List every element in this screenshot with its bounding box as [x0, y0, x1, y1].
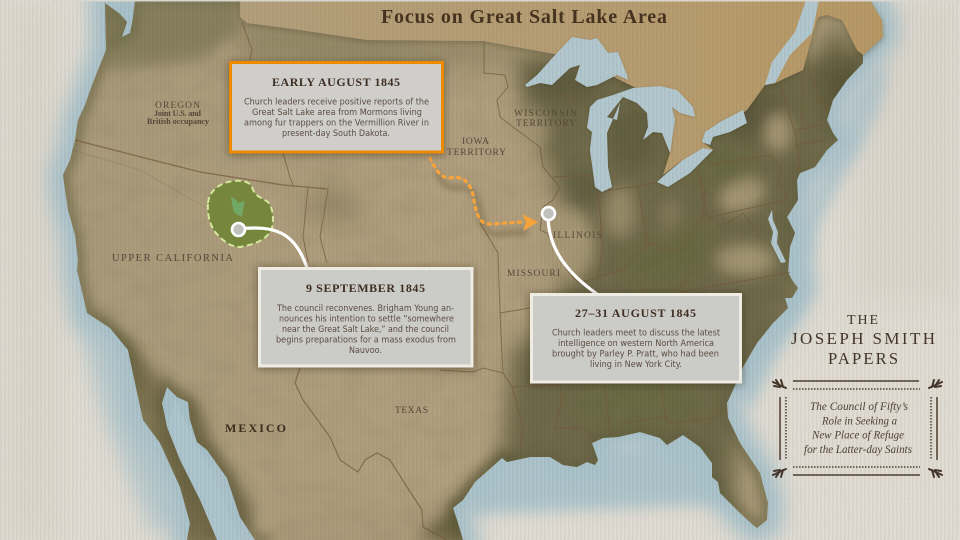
- panel: 27-31 August 1845: [532, 294, 740, 382]
- label: Wisconsin Territory: [514, 109, 577, 129]
- icon: Great Salt Lake: [231, 196, 245, 217]
- panel: early August 1845: [230, 62, 442, 152]
- arrowhead: [522, 214, 538, 231]
- Oregon boundary: [75, 140, 328, 189]
- subtitle text: Role in Seeking a: [821, 416, 897, 428]
- logo: The Joseph Smith Papers: THE: [847, 313, 878, 328]
- body text: [276, 303, 456, 356]
- logo: The Joseph Smith Papers: [791, 313, 935, 368]
- body text: Great Salt Lake area from Mormons living: [252, 107, 422, 118]
- body text: The council reconvenes. Brigham Young an-: [276, 303, 454, 314]
- body text: present-day South Dakota.: [282, 128, 390, 139]
- label: Oregon: OREGON: [155, 101, 200, 111]
- heading: 27–31 AUGUST 1845: [575, 306, 696, 320]
- subtitle text: [804, 401, 913, 456]
- body text: intelligence on western North America: [558, 338, 714, 349]
- icon: corner ornaments: [773, 380, 942, 477]
- body text: brought by Parley P. Pratt, who had been: [552, 348, 719, 360]
- connector: Nauvoo point to late August panel: [542, 207, 597, 294]
- Lake Michigan: [587, 95, 623, 192]
- label: Iowa Territory: IOWA: [462, 137, 489, 147]
- body text: among fur trappers on the Vermillion River in: [244, 118, 429, 128]
- map labels: [112, 101, 602, 435]
- body text: Church leaders receive positive reports of the: [244, 96, 429, 108]
- body text: living in New York City.: [590, 359, 682, 370]
- heading: 9 SEPTEMBER 1845: [306, 281, 425, 295]
- Canada region: [240, 0, 883, 175]
- label: Oregon: British occupancy: [147, 117, 209, 126]
- western and northern shading: [234, 23, 517, 228]
- logo: The Joseph Smith Papers: JOSEPH SMITH: [791, 329, 935, 348]
- label: Mexico: MEXICO: [225, 421, 286, 435]
- Great Salt Lake focus area: [208, 181, 273, 247]
- connector: Salt Lake point to September panel: [232, 223, 307, 268]
- label: Wisconsin Territory: WISCONSIN: [514, 109, 577, 119]
- label: Oregon: [147, 101, 209, 126]
- label: Wisconsin Territory: TERRITORY: [516, 119, 576, 129]
- label: Upper California: UPPER CALIFORNIA: [112, 253, 233, 264]
- green tint in the east: [645, 162, 727, 272]
- label: Iowa Territory: [447, 137, 506, 158]
- panel: 9 September 1845: [260, 268, 472, 366]
- subtitle frame: [773, 380, 942, 477]
- body text: Nauvoo.: [349, 345, 382, 356]
- rivers and territorial boundaries: [72, 22, 827, 540]
- label: Iowa Territory: TERRITORY: [447, 148, 506, 158]
- eastern olive region: [500, 28, 880, 540]
- Mexico Pacific coast shading and bottom relief: [85, 0, 535, 540]
- logo: The Joseph Smith Papers: PAPERS: [828, 349, 898, 368]
- label: Oregon: Joint U.S. and: [154, 109, 202, 118]
- body text: nounces his intention to settle “somewhere: [279, 314, 454, 324]
- body text: [244, 96, 429, 139]
- Great Lakes: [525, 37, 747, 192]
- label: Texas: TEXAS: [395, 406, 428, 416]
- body text: [552, 328, 720, 370]
- Saint Lawrence River and bays: [765, 0, 819, 263]
- body text: near the Great Salt Lake,” and the council: [282, 324, 449, 335]
- Lake Ontario: [702, 110, 747, 145]
- route arrow to Illinois: [430, 158, 538, 234]
- label: Illinois: ILLINOIS: [553, 231, 602, 241]
- Lake Superior: [525, 37, 628, 87]
- body text: begins preparations for a mass exodus from: [276, 334, 456, 346]
- body text: Church leaders meet to discuss the latest: [552, 328, 720, 338]
- subtitle text: New Place of Refuge: [811, 430, 904, 442]
- label: Missouri: MISSOURI: [507, 269, 560, 279]
- lighter tan patches in the east: [510, 110, 792, 350]
- heading: EARLY AUGUST 1845: [272, 75, 400, 89]
- subtitle text: for the Latter-day Saints: [804, 444, 913, 456]
- Lake Huron: [613, 86, 695, 153]
- subtitle text: The Council of Fifty’s: [810, 401, 909, 413]
- title: Focus on Great Salt Lake Area: [381, 6, 667, 28]
- Lake Erie: [657, 148, 713, 187]
